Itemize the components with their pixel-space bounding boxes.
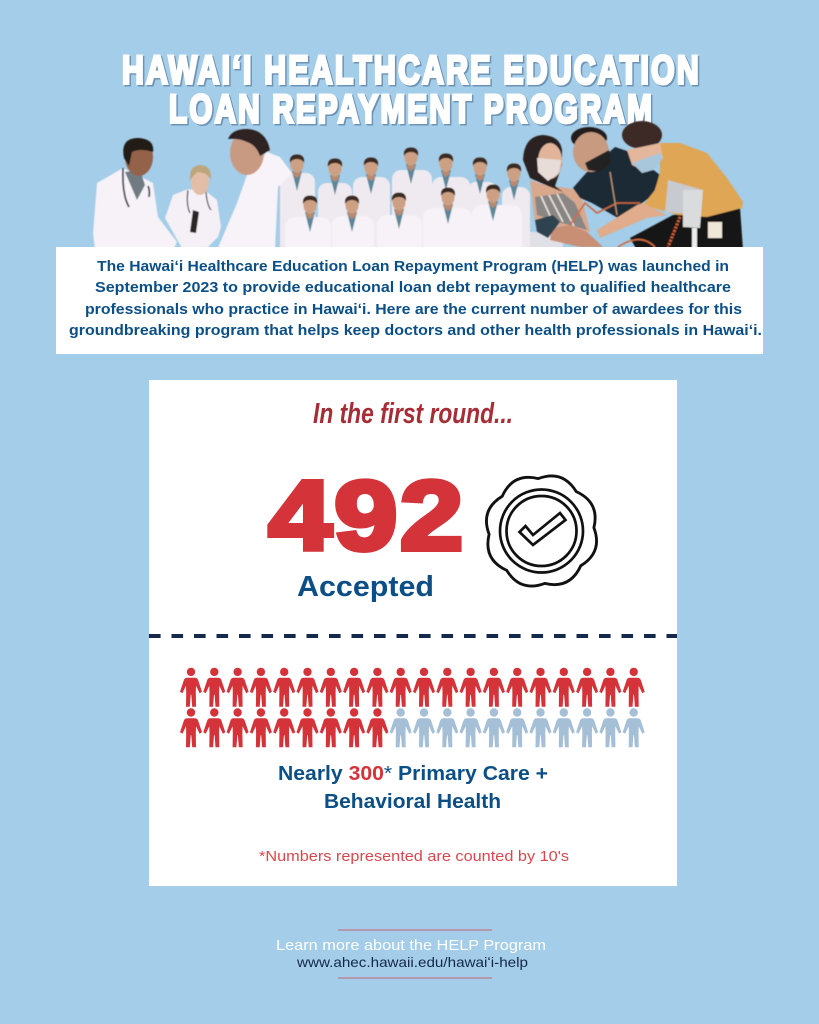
footnote: *Numbers represented are counted by 10's (259, 848, 569, 865)
title (122, 49, 702, 133)
caption: primary care and behavioral health (278, 763, 548, 813)
front row of physicians (285, 184, 522, 267)
stats panel (149, 380, 677, 886)
nurse in black with black mask (571, 127, 743, 250)
footer (276, 930, 546, 978)
caption: primary care and behavioral health: Nearly 300* Primary Care + (278, 763, 548, 785)
intro panel (56, 247, 763, 354)
pictogram row 1: 20 red people (180, 668, 645, 707)
title: LOAN REPAYMENT PROGRAM (170, 89, 656, 133)
intro text: The Hawaiʻi Healthcare Education Loan Repayment Program (HELP) was launched in (97, 259, 729, 275)
footer: website address: www.ahec.hawaii.edu/hawaiʻi-help (296, 954, 528, 970)
doctor with stethoscope (93, 138, 177, 250)
intro text (69, 259, 762, 339)
back row of physicians (280, 148, 530, 263)
caption: primary care and behavioral health: Behavioral Health (324, 791, 501, 813)
title: LOAN REPAYMENT PROGRAM (169, 88, 654, 132)
footer: learn more: Learn more about the HELP Program (276, 937, 546, 954)
photo collage: healthcare professionals (93, 121, 743, 267)
label: accepted: Accepted (297, 571, 434, 603)
intro text: groundbreaking program that helps keep doctors and other health professionals in Hawaiʻi. (69, 323, 762, 339)
icon: seal with check mark (486, 476, 597, 586)
big number 492: 492 (268, 460, 466, 570)
heading: in the first round: In the first round... (313, 398, 513, 430)
nurse in orange (597, 121, 743, 238)
intro text: September 2023 to provide educational loan debt repayment to qualified healthcare (95, 280, 731, 296)
seated woman doctor (165, 165, 221, 250)
patient with mask and blood pressure cuff (523, 135, 603, 250)
blood pressure monitor (570, 172, 722, 250)
pictogram row 2: 9 red and 11 light blue people (180, 708, 645, 747)
dashed divider (149, 634, 677, 638)
tall doctor from side (217, 129, 292, 250)
intro text: professionals who practice in Hawaiʻi. Here are the current number of awardees for this (85, 302, 742, 318)
